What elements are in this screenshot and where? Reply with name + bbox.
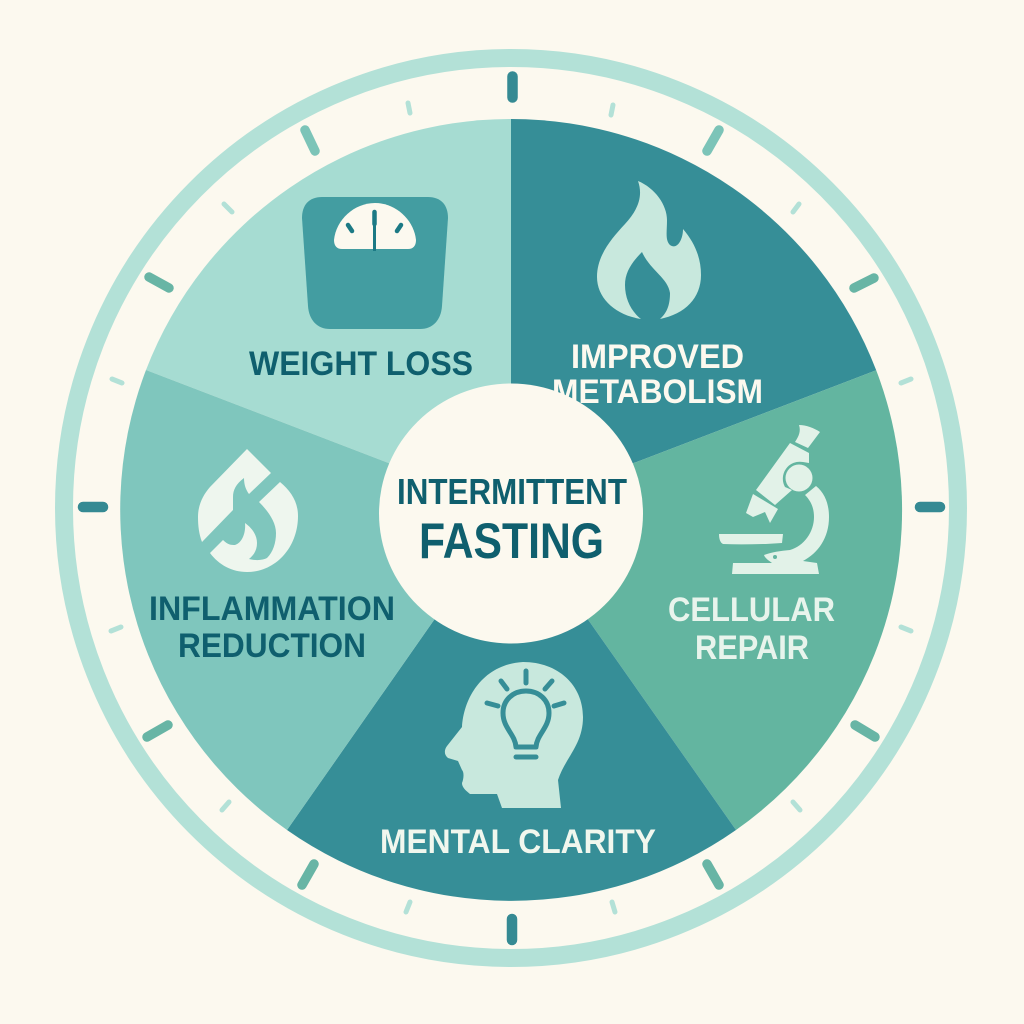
- label: inflammation reduction: INFLAMMATION: [149, 590, 395, 628]
- label: improved metabolism: [552, 338, 763, 411]
- clock tick marks: [83, 76, 940, 940]
- panel: improved metabolism: [511, 119, 876, 510]
- panel: weight loss: [146, 119, 511, 510]
- segment: mental clarity: [287, 510, 736, 901]
- segment: inflammation reduction: [120, 370, 511, 830]
- outer clock ring: [64, 58, 958, 958]
- segment: improved metabolism: [511, 119, 876, 510]
- icon: microscope: [719, 425, 829, 574]
- title: FASTING: [419, 513, 604, 569]
- panel: cellular repair: [511, 370, 902, 830]
- icon: bathroom scale: [302, 197, 448, 329]
- title: [397, 471, 627, 569]
- label: cellular repair: CELLULAR: [668, 591, 835, 629]
- segment: weight loss: [146, 119, 511, 510]
- icon: flame: [597, 181, 701, 319]
- label: cellular repair: [668, 591, 835, 667]
- title: INTERMITTENT: [397, 471, 627, 512]
- icon: crossed-out flame drop: [198, 449, 298, 572]
- label: mental clarity: MENTAL CLARITY: [380, 823, 656, 861]
- panel: mental clarity: [287, 510, 736, 901]
- label: weight loss: WEIGHT LOSS: [249, 345, 473, 383]
- icon: head with light bulb: [445, 662, 583, 808]
- label: inflammation reduction: [149, 590, 395, 665]
- label: inflammation reduction: REDUCTION: [178, 627, 366, 665]
- label: cellular repair: REPAIR: [695, 629, 809, 667]
- segment: cellular repair: [511, 370, 902, 830]
- label: improved metabolism: IMPROVED: [571, 338, 744, 376]
- label: improved metabolism: METABOLISM: [552, 373, 763, 411]
- panel: inflammation reduction: [120, 370, 511, 830]
- center circle: [379, 384, 643, 644]
